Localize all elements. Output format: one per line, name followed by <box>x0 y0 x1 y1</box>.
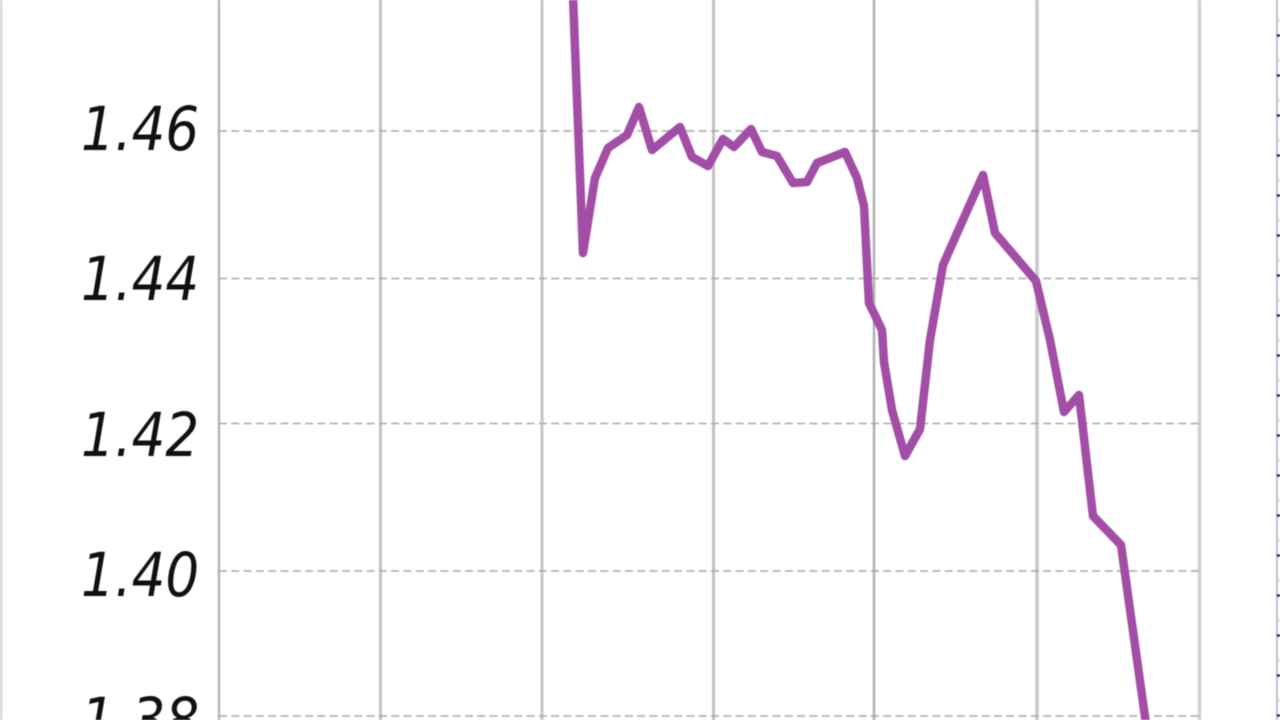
y-axis labels: 1.44 <box>81 245 199 315</box>
purple data line <box>573 0 1146 720</box>
y-axis labels <box>81 95 199 720</box>
y-axis labels: 1.46 <box>81 95 199 165</box>
y-axis labels: 1.42 <box>81 401 199 471</box>
y-axis labels: 1.40 <box>81 541 199 611</box>
right-edge axis with tick marks <box>1276 0 1280 720</box>
